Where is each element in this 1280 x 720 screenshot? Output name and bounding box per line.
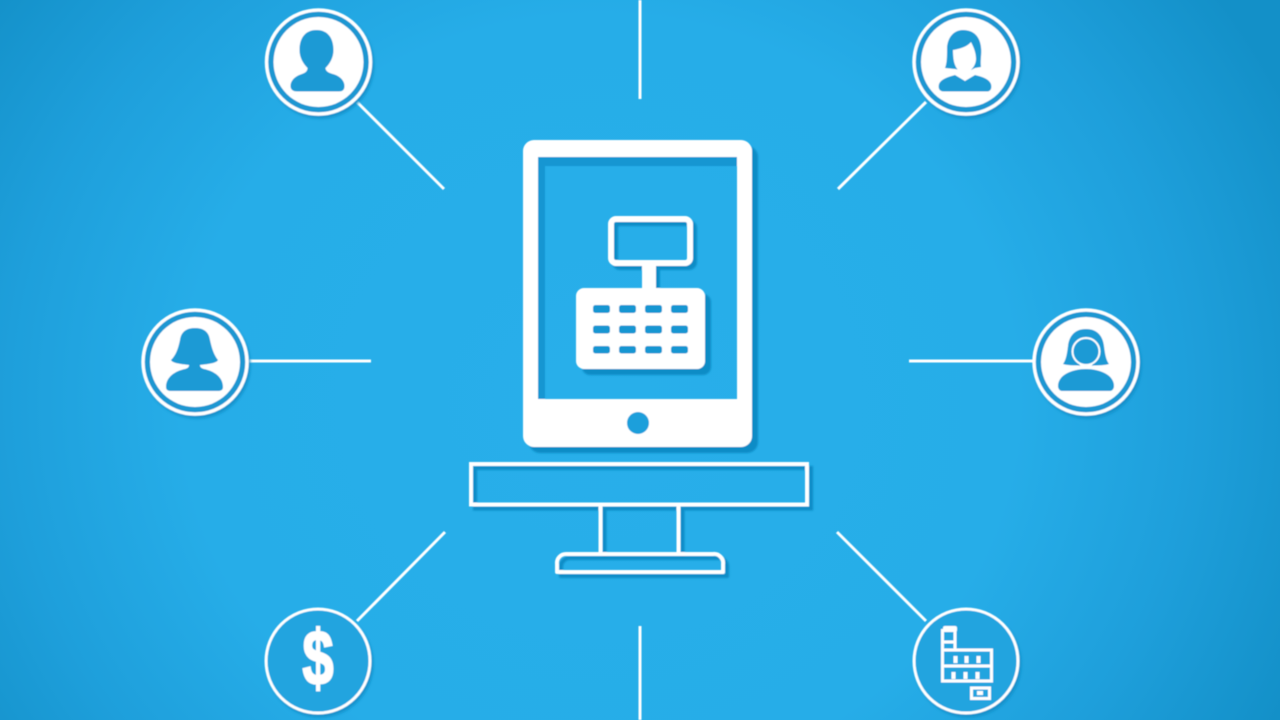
- hair: [945, 30, 981, 70]
- node: woman with short hair: [914, 10, 1018, 114]
- diagram artwork: [143, 0, 1138, 720]
- disc: [921, 17, 1011, 107]
- icon: tablet with cash register: [523, 140, 752, 447]
- node: dollar: [266, 609, 370, 713]
- connector: bottom: [638, 626, 642, 720]
- shoulders: [1058, 369, 1114, 391]
- connector: bottom left: [357, 532, 445, 621]
- register neck: [642, 265, 656, 291]
- neck: [1080, 364, 1092, 368]
- icon: monitor stand: [471, 464, 807, 572]
- node: operator with headset: [1034, 310, 1138, 414]
- face: [953, 42, 976, 81]
- stand legs: [600, 506, 678, 553]
- ring: [914, 609, 1018, 713]
- tablet body: [523, 140, 752, 447]
- windows: [943, 626, 983, 695]
- connector: bottom right: [837, 532, 926, 621]
- connector: top: [638, 0, 642, 99]
- register keypad: [576, 288, 705, 369]
- disc: [150, 317, 240, 407]
- ring: [143, 310, 247, 414]
- building outline: [942, 630, 992, 698]
- dollar sign: $: [302, 614, 334, 702]
- node: man: [266, 10, 370, 114]
- connector: left: [249, 360, 371, 362]
- monitor bar: [471, 464, 807, 504]
- connector: top right: [838, 102, 926, 189]
- man silhouette: [290, 30, 344, 92]
- screen inner shadow: [538, 157, 737, 399]
- floor divider: [942, 664, 992, 668]
- disc: [1041, 317, 1131, 407]
- keypad keys: [593, 305, 688, 354]
- ring: [1034, 310, 1138, 414]
- stand base: [557, 554, 723, 572]
- face outline: [1072, 338, 1100, 365]
- shoulders: [939, 75, 991, 92]
- ring: [914, 10, 1018, 114]
- connector: right: [909, 360, 1033, 362]
- ring: [266, 10, 370, 114]
- node: building: [914, 609, 1018, 713]
- hair: [1063, 329, 1109, 366]
- disc: [274, 17, 364, 107]
- ring: [266, 609, 370, 713]
- main block: [942, 650, 992, 681]
- tower: [942, 630, 955, 651]
- node: woman silhouette: [143, 310, 247, 414]
- home button: [627, 412, 649, 434]
- register display: [611, 219, 690, 263]
- connector: top left: [357, 102, 444, 189]
- annex: [972, 688, 990, 698]
- woman silhouette: [166, 328, 223, 391]
